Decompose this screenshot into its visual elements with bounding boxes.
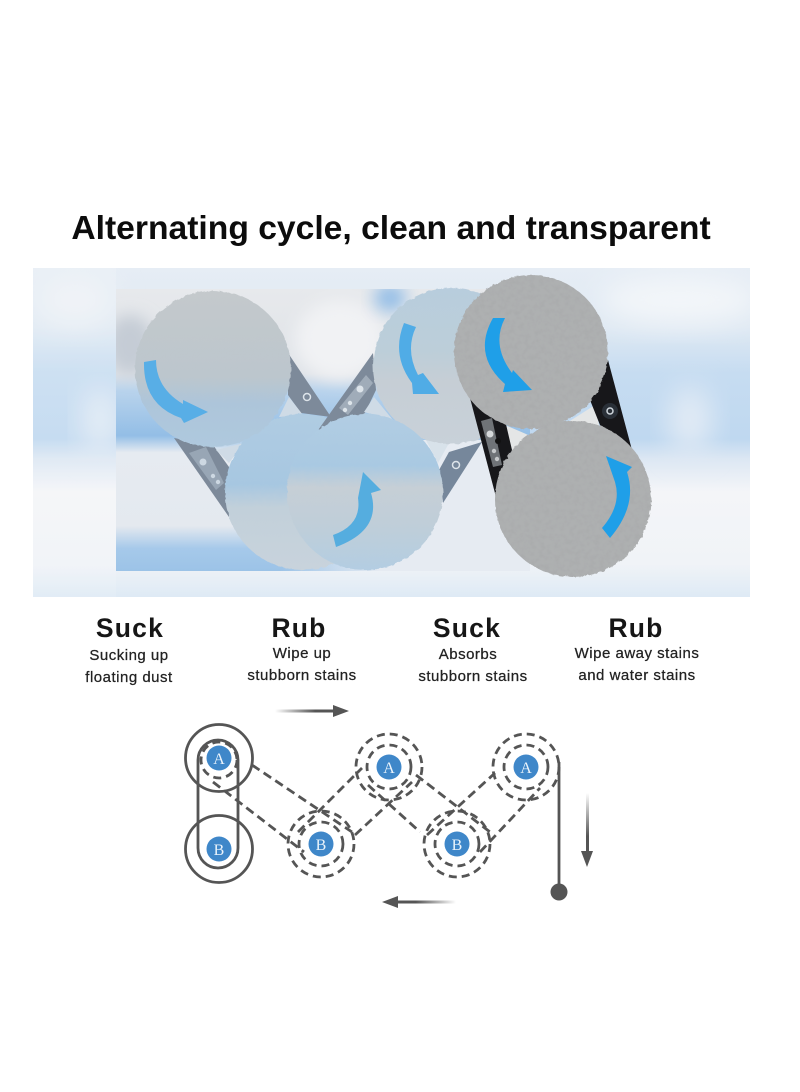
node A bbox=[514, 754, 538, 780]
caption: suck 2: Absorbs bbox=[439, 646, 497, 663]
arrow: right bbox=[275, 705, 349, 717]
start position: robot outline bbox=[186, 724, 252, 882]
step label: suck 2 bbox=[418, 613, 528, 685]
caption: rub 2: and water stains bbox=[578, 667, 696, 684]
upper pad bbox=[373, 288, 529, 444]
node A: A bbox=[520, 760, 532, 777]
lower pad bbox=[225, 414, 381, 570]
caption: rub 1 bbox=[247, 645, 357, 684]
lower pad bbox=[495, 421, 651, 577]
zigzag dashed path bbox=[213, 765, 540, 852]
step label: rub 2 bbox=[574, 613, 699, 684]
node A bbox=[376, 754, 402, 780]
ghost robot: second position bbox=[287, 288, 529, 570]
arrow: rotation bbox=[399, 323, 439, 394]
step label: rub 1 bbox=[247, 613, 357, 684]
arrow: rotation bbox=[602, 456, 632, 538]
node B bbox=[444, 832, 470, 856]
arrow: left bbox=[382, 896, 456, 908]
heading: rub: Rub bbox=[271, 613, 327, 643]
caption: rub 2 bbox=[574, 645, 699, 684]
node B: B bbox=[452, 837, 462, 854]
sky background bbox=[33, 268, 760, 597]
end path line bbox=[558, 762, 560, 892]
robot body strips bbox=[316, 353, 482, 503]
heading: suck: Suck bbox=[96, 613, 164, 643]
ghost robot: first position bbox=[135, 291, 381, 570]
arrow: down bbox=[581, 793, 593, 867]
arrow: rotation bbox=[485, 318, 532, 392]
caption: rub 2: Wipe away stains bbox=[575, 645, 699, 662]
lower pad bbox=[287, 414, 443, 570]
dashed positions bbox=[201, 734, 559, 877]
caption: suck 1: Sucking up bbox=[89, 647, 169, 664]
caption: rub 1: stubborn stains bbox=[247, 667, 357, 684]
caption: suck 1 bbox=[85, 647, 173, 686]
caption: rub 1: Wipe up bbox=[273, 645, 331, 662]
node A: A bbox=[383, 760, 395, 777]
node B: B bbox=[214, 842, 224, 859]
title: Alternating cycle, clean and transparent bbox=[71, 210, 711, 247]
main robot bbox=[454, 275, 651, 577]
heading: suck: Suck bbox=[433, 613, 501, 643]
upper pad bbox=[135, 291, 291, 447]
caption: suck 2 bbox=[418, 646, 528, 685]
inner translucent sky panel bbox=[106, 284, 530, 571]
heading: rub: Rub bbox=[608, 613, 664, 643]
node A bbox=[206, 746, 232, 770]
end point bbox=[550, 884, 568, 900]
node B bbox=[206, 836, 232, 862]
arrow: rotation bbox=[333, 472, 381, 547]
illustration: sky panel with cleaning robot pads bbox=[33, 268, 750, 597]
caption: suck 2: stubborn stains bbox=[418, 668, 528, 685]
node B: B bbox=[316, 837, 326, 854]
upper pad bbox=[454, 275, 608, 429]
arrow: rotation bbox=[144, 360, 208, 423]
robot body strips bbox=[174, 353, 331, 517]
node B bbox=[308, 832, 334, 856]
caption: suck 1: floating dust bbox=[85, 669, 173, 686]
step label: suck 1 bbox=[85, 613, 173, 686]
node A: A bbox=[213, 751, 225, 768]
robot body bbox=[470, 360, 632, 497]
